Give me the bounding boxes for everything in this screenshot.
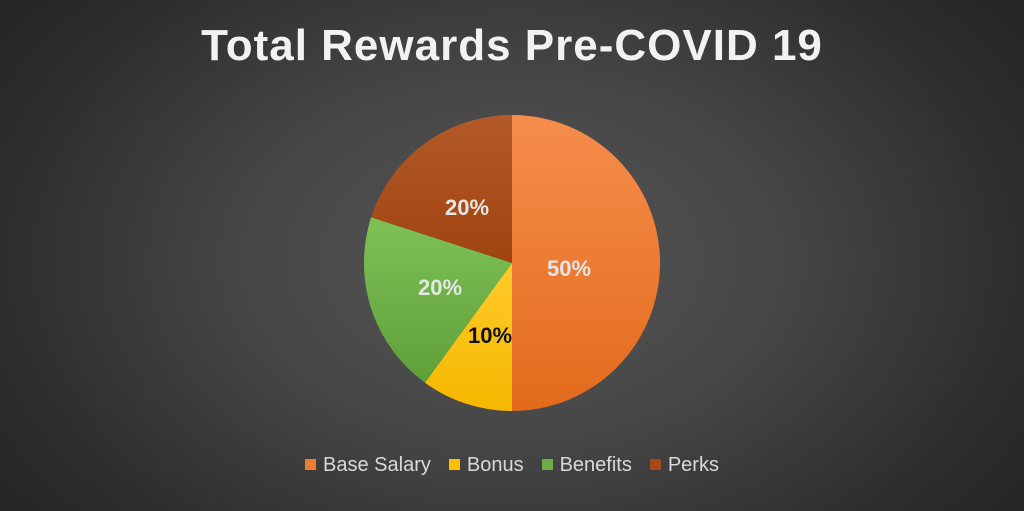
title: Total Rewards Pre-COVID 19: [201, 21, 823, 70]
legend: Base Salary Bonus Benefits Perks: [323, 454, 719, 476]
slice: bonus: [425, 263, 512, 411]
slice: benefits: [364, 217, 512, 383]
label: 10%: 10%: [468, 323, 512, 348]
label: 20% perks: 20%: [445, 195, 489, 220]
slice: base salary: [512, 115, 660, 411]
label: 50%: 50%: [547, 256, 591, 281]
label: 20% benefits: 20%: [418, 275, 462, 300]
slice: perks: [371, 115, 512, 263]
